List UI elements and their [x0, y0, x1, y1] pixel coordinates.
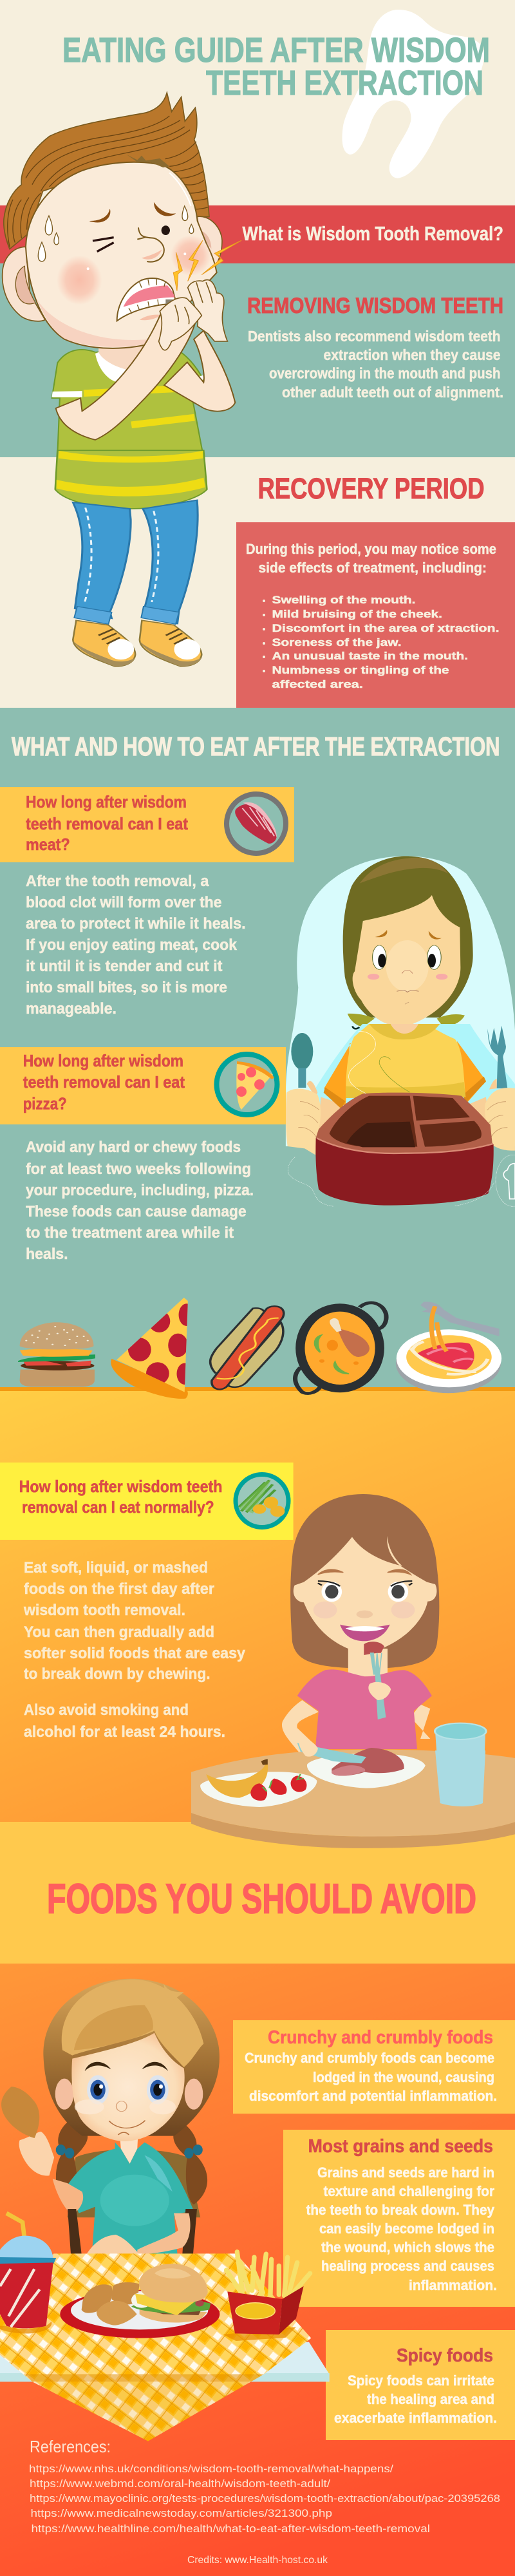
chair legs	[68, 2209, 197, 2254]
answer text: to break down by chewing.	[24, 1665, 210, 1683]
side effects list: Swelling of the mouth.	[272, 594, 416, 606]
girl arms	[282, 1700, 319, 1760]
girl face	[294, 1536, 436, 1653]
boy face	[26, 162, 217, 348]
girl body	[315, 1024, 515, 1132]
girl hands	[307, 1079, 497, 1097]
icon: plate with noodles	[396, 1302, 501, 1393]
side effects list: An unusual taste in the mouth.	[272, 650, 468, 662]
panel: removing wisdom teeth	[247, 294, 503, 401]
references list: https://www.medicalnewstoday.com/articles/321300.php	[31, 2507, 332, 2519]
title	[62, 31, 490, 102]
lunch box	[315, 1093, 494, 1206]
text block: exacerbate inflammation.	[334, 2410, 497, 2426]
text block: extraction when they cause	[323, 346, 501, 363]
braids	[56, 2121, 207, 2211]
fries	[227, 2252, 310, 2297]
text block: lodged in the wound, causing	[313, 2069, 494, 2085]
intro text	[246, 541, 496, 576]
panel: eat normally question	[0, 1463, 294, 1741]
question text: removal can I eat normally?	[22, 1497, 214, 1517]
panel: pizza question	[0, 1047, 286, 1263]
panel: meat question	[0, 787, 294, 1018]
fork with food	[364, 1642, 391, 1719]
icon: fork	[487, 1026, 507, 1088]
answer text: After the tooth removal, a	[26, 873, 209, 890]
answer text: blood clot will form over the	[26, 894, 221, 911]
question banner	[0, 1463, 294, 1540]
answer text: You can then gradually add	[24, 1624, 214, 1641]
references list: https://www.nhs.uk/conditions/wisdom-tooth-removal/what-happens/	[29, 2463, 393, 2475]
plate of fruit	[200, 1759, 317, 1807]
girl cheeks and nose	[314, 1602, 415, 1618]
boy sweat drops	[38, 206, 194, 261]
text block: healing process and causes	[321, 2258, 494, 2274]
panel: most grains and seeds	[283, 2130, 515, 2307]
panel: crunchy and crumbly foods	[233, 2020, 515, 2114]
girl eyes	[373, 945, 386, 969]
text block: Spicy foods can irritate	[348, 2372, 494, 2389]
boy jeans	[73, 502, 131, 618]
heading: Crunchy and crumbly foods	[268, 2027, 493, 2048]
fries box	[227, 2286, 304, 2334]
girl eyes	[318, 1569, 412, 1602]
boy cheeks	[57, 256, 102, 305]
side effects list: Numbness or tingling of the	[272, 664, 449, 676]
intro text: side effects of treatment, including:	[259, 560, 487, 576]
text block: the teeth to break down. They	[306, 2202, 495, 2218]
icon: paella pan	[295, 1303, 386, 1394]
boy shirt lower	[55, 450, 207, 509]
question banner	[0, 787, 294, 862]
heading: Spicy foods	[397, 2345, 493, 2366]
boy ears	[3, 247, 45, 321]
answer text: into small bites, so it is more	[26, 979, 227, 996]
question text: How long after wisdom	[26, 792, 187, 811]
references list: https://www.mayoclinic.org/tests-procedures/wisdom-tooth-extraction/about/pac-20395268	[30, 2492, 500, 2505]
text block: can easily become lodged in	[319, 2221, 494, 2237]
girl bows	[348, 1014, 375, 1027]
girl eyes	[85, 2062, 169, 2105]
fried chicken leg	[1, 2087, 39, 2138]
girl neck	[120, 2136, 138, 2164]
answer text	[26, 1139, 254, 1263]
boy arms	[56, 314, 197, 440]
boy neck and collar	[98, 342, 164, 377]
girl neck	[348, 1649, 388, 1676]
tablecloth	[0, 2253, 311, 2441]
answer text: for at least two weeks following	[26, 1160, 251, 1178]
answer text: area to protect it while it heals.	[26, 915, 246, 933]
text block: the healing area and	[367, 2391, 494, 2407]
side effects box	[236, 522, 515, 708]
references list	[29, 2463, 500, 2535]
boy hands	[188, 280, 227, 341]
side effects list	[263, 594, 500, 690]
text block	[334, 2372, 497, 2426]
panel: spicy foods	[326, 2330, 515, 2440]
question text: How long after wisdom teeth	[19, 1477, 222, 1496]
text block: discomfort and potential inflammation.	[249, 2088, 497, 2104]
girl halo	[286, 856, 515, 1146]
icon: tooth	[342, 10, 484, 178]
plate of ham	[307, 1748, 426, 1788]
icon: pizza slice	[111, 1298, 194, 1399]
question text: meat?	[26, 835, 70, 854]
glass	[435, 1723, 486, 1806]
illustration: girl eating fried chicken	[0, 1979, 330, 2441]
girl face	[71, 2033, 185, 2141]
heading: Most grains and seeds	[308, 2136, 493, 2157]
icon: meat	[227, 794, 286, 853]
girl right arm and hand	[86, 2213, 191, 2264]
question text: pizza?	[23, 1094, 67, 1113]
references heading: References:	[30, 2437, 111, 2456]
question banner	[0, 1047, 286, 1124]
answer text: heals.	[26, 1245, 68, 1263]
question text	[19, 1477, 222, 1517]
text block	[248, 328, 503, 401]
icon: spoon	[291, 1033, 313, 1088]
illustration: happy girl eating at table	[191, 1494, 515, 1848]
girl shirt	[297, 1669, 432, 1749]
icon: burger	[18, 1322, 95, 1387]
boy shoes	[73, 620, 135, 667]
boy hair	[4, 93, 209, 249]
question text	[23, 1051, 185, 1113]
side effects list: affected area.	[272, 678, 363, 690]
girl hair	[43, 1979, 220, 2136]
answer text: softer solid foods that are easy	[24, 1645, 246, 1662]
icon: asparagus and vegetables	[236, 1475, 288, 1528]
knife and hand	[297, 1737, 366, 1763]
table	[191, 1750, 515, 1848]
intro text: During this period, you may notice some	[246, 541, 496, 557]
boy nose	[142, 249, 162, 260]
answer text: If you enjoy eating meat, cook	[26, 936, 238, 954]
plate with chicken and burger	[60, 2264, 220, 2338]
text block: other adult teeth out of alignment.	[282, 384, 503, 401]
question text: teeth removal can I eat	[26, 814, 188, 833]
answer text	[23, 1559, 246, 1741]
girl ears	[55, 2079, 73, 2110]
answer text: Also avoid smoking and	[24, 1701, 189, 1719]
girl wires	[349, 1032, 382, 1121]
side effects list: Discomfort in the area of xtraction.	[272, 622, 500, 634]
answer text	[26, 873, 246, 1018]
girl arm holding chicken	[19, 2132, 83, 2215]
text block: texture and challenging for	[323, 2183, 494, 2199]
girl hair	[343, 856, 473, 1018]
answer text: alcohol for at least 24 hours.	[24, 1723, 225, 1741]
question text	[26, 792, 188, 854]
answer text: foods on the first day after	[24, 1580, 214, 1598]
icon: pizza	[216, 1054, 277, 1115]
text block: Crunchy and crumbly foods can become	[245, 2050, 494, 2066]
boy mouth	[117, 278, 176, 321]
answer text: manageable.	[26, 1000, 117, 1018]
girl nose and mouth	[75, 2099, 176, 2135]
answer text: wisdom tooth removal.	[23, 1602, 185, 1619]
answer text: it until it is tender and cut it	[26, 958, 222, 975]
text block: the wound, which slows the	[321, 2239, 494, 2255]
girl face	[353, 895, 460, 1027]
boy eyebrows and eyes	[89, 203, 176, 222]
references list: https://www.healthline.com/health/what-to-eat-after-wisdom-teeth-removal	[31, 2523, 430, 2535]
icon: hot dog	[211, 1306, 284, 1389]
answer text: to the treatment area while it	[26, 1224, 234, 1242]
question text: How long after wisdom	[23, 1051, 183, 1070]
credits: Credits: www.Health-host.co.uk	[187, 2555, 328, 2566]
food illustrations row	[18, 1298, 501, 1399]
side effects list: Soreness of the jaw.	[272, 636, 402, 649]
shadows on cloth	[0, 2322, 296, 2341]
panel: recovery period	[236, 472, 515, 708]
boy shirt	[52, 346, 204, 454]
answer text: your procedure, including, pizza.	[26, 1182, 254, 1199]
question text: teeth removal can I eat	[23, 1072, 185, 1092]
answer text: Avoid any hard or chewy foods	[26, 1139, 241, 1156]
boy toothache lightning	[173, 240, 241, 291]
chair	[68, 2149, 200, 2217]
references list: https://www.webmd.com/oral-health/wisdom-teeth-adult/	[30, 2477, 330, 2490]
side effects list: Mild bruising of the cheek.	[272, 608, 442, 620]
girl hair	[290, 1494, 439, 1668]
girl mouth	[340, 1625, 390, 1641]
drink cup	[0, 2213, 56, 2328]
girl shirt	[68, 2143, 194, 2254]
references	[29, 2437, 500, 2535]
text block: Grains and seeds are hard in	[317, 2164, 494, 2181]
table top	[0, 2342, 330, 2382]
text block	[245, 2050, 497, 2104]
illustration: boy with toothache	[3, 93, 241, 667]
answer text: These foods can cause damage	[26, 1203, 247, 1220]
illustration: sad girl with lunch box	[286, 856, 515, 1206]
text block: inflammation.	[409, 2277, 497, 2293]
text block	[306, 2164, 497, 2293]
answer text: Eat soft, liquid, or mashed	[24, 1559, 208, 1577]
